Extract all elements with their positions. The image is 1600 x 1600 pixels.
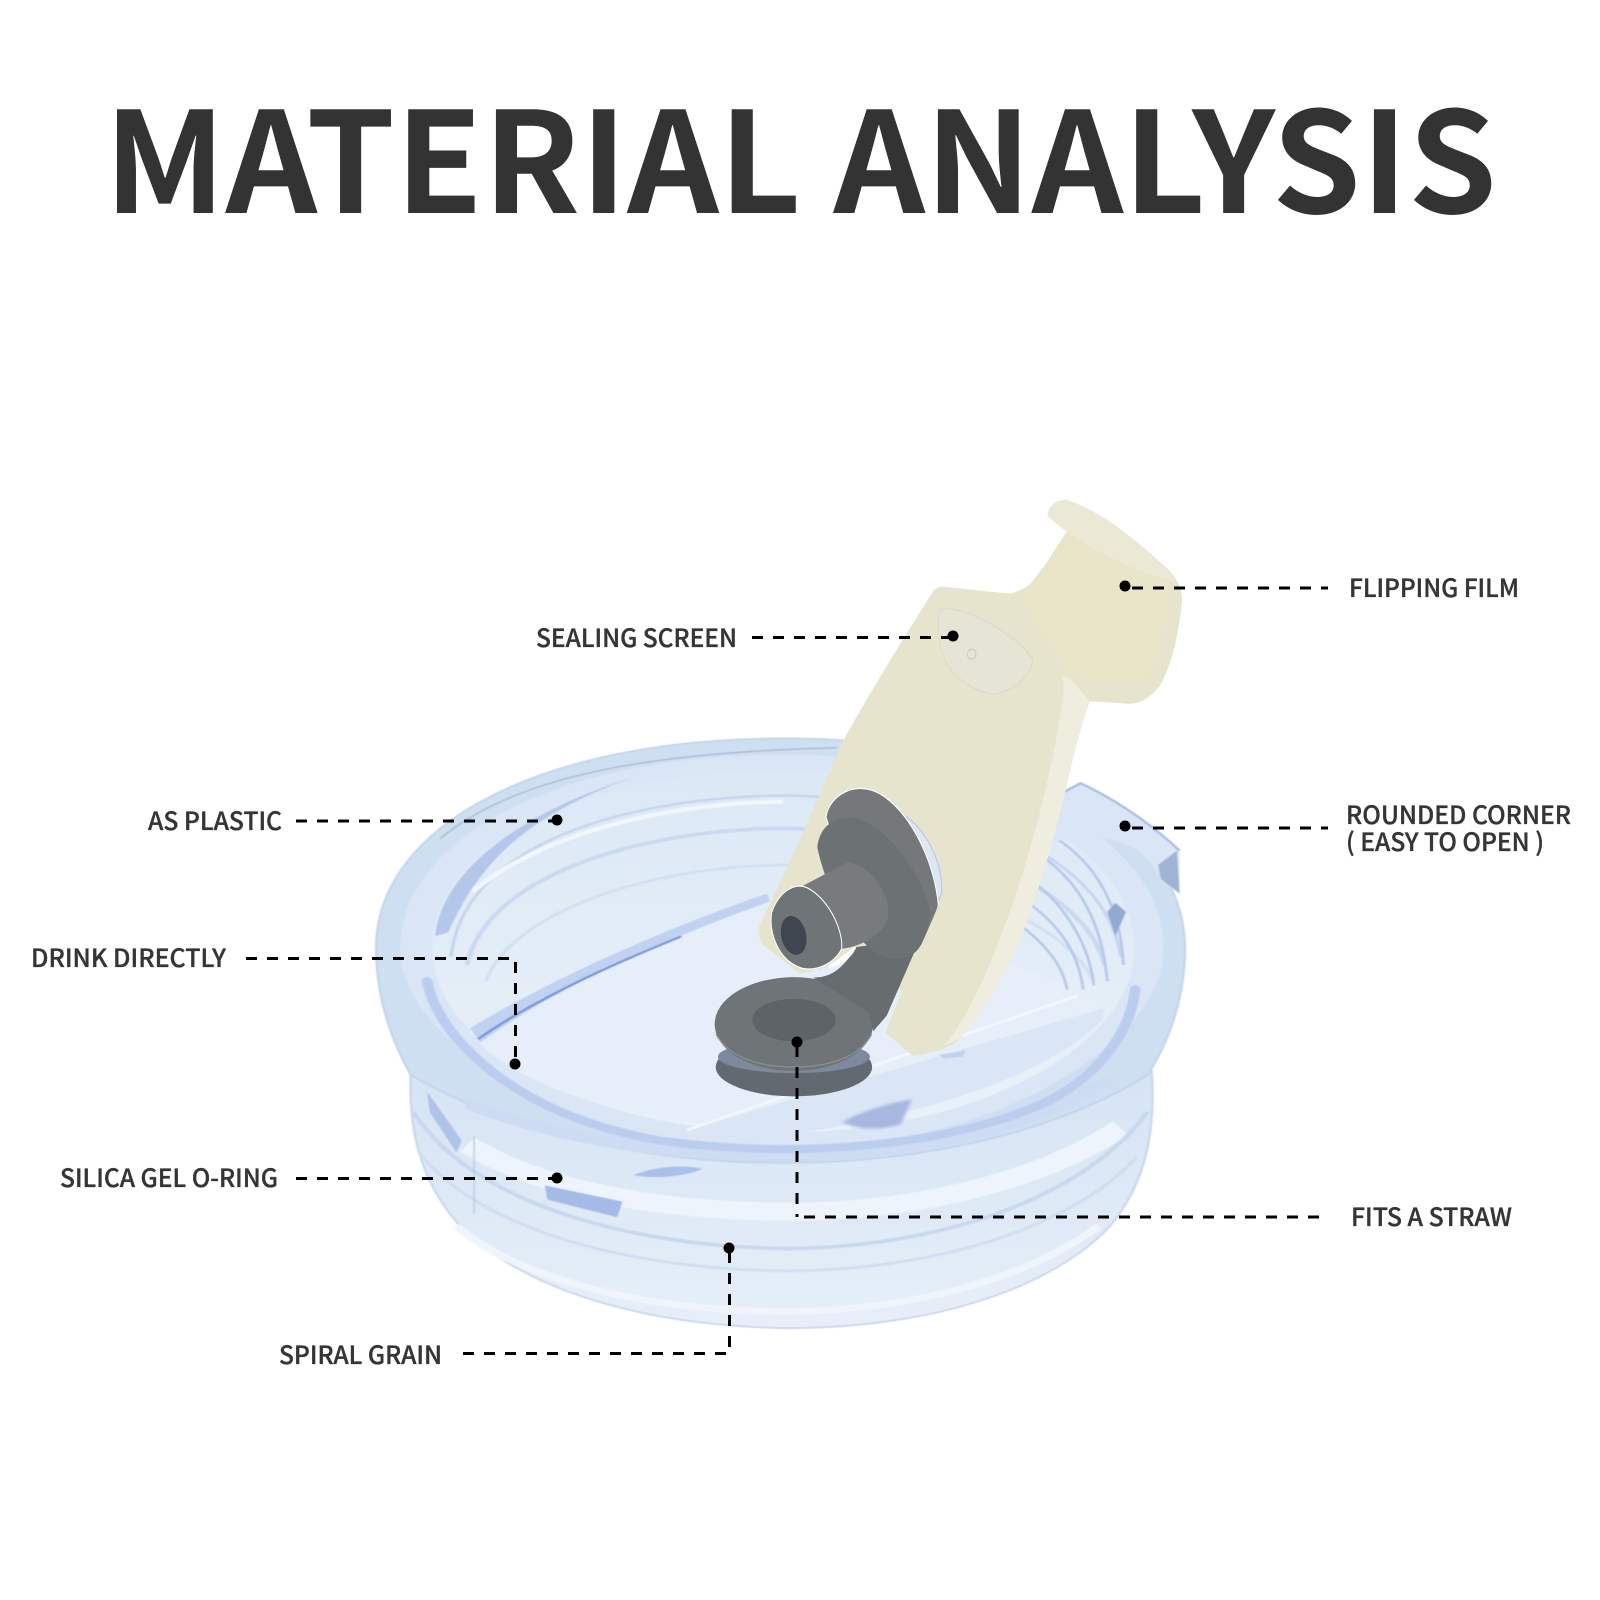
callout: rounded corner: ROUNDED CORNER [1346,796,1571,832]
callout: AS plastic [148,802,562,838]
flap tab inner shading [1020,534,1170,680]
callout: rounded corner [1120,796,1571,859]
callout: spiral grain: SPIRAL GRAIN [279,1336,442,1372]
callout: spiral grain [279,1242,734,1372]
title: MATERIAL ANALYSIS [104,52,1497,254]
callout: fits a straw [792,1036,1512,1234]
flap tab lip [1048,500,1176,581]
callout: sealing screen: SEALING SCREEN [536,619,737,655]
callout: flipping film [1120,569,1519,605]
product: transparent lid [376,738,1185,1328]
silicone stopper [771,788,942,1031]
silica gel tab highlights [545,1166,703,1217]
flap lower front edge [886,817,1053,1056]
callout: AS plastic: AS PLASTIC [148,802,282,838]
product: cream flip lid with stopper [759,500,1182,1056]
callout: silica gel o-ring: SILICA GEL O-RING [60,1159,278,1195]
lid upper rim [376,738,1185,1163]
silicone straw ring [715,977,873,1096]
callout: drink directly [31,939,520,1070]
lid opening tab [1051,783,1180,893]
callout: sealing screen [536,619,958,655]
callout: flipping film: FLIPPING FILM [1349,569,1519,605]
callout: silica gel o-ring [60,1159,562,1195]
callout: rounded corner: ( EASY TO OPEN ) [1346,823,1544,859]
lid lower threaded body [411,1071,1153,1328]
flap fold highlight [943,675,1090,1046]
callout: fits a straw: FITS A STRAW [1351,1198,1512,1234]
cream flap body [759,500,1182,1056]
sealing button [938,609,1033,694]
callout: drink directly: DRINK DIRECTLY [31,939,226,975]
